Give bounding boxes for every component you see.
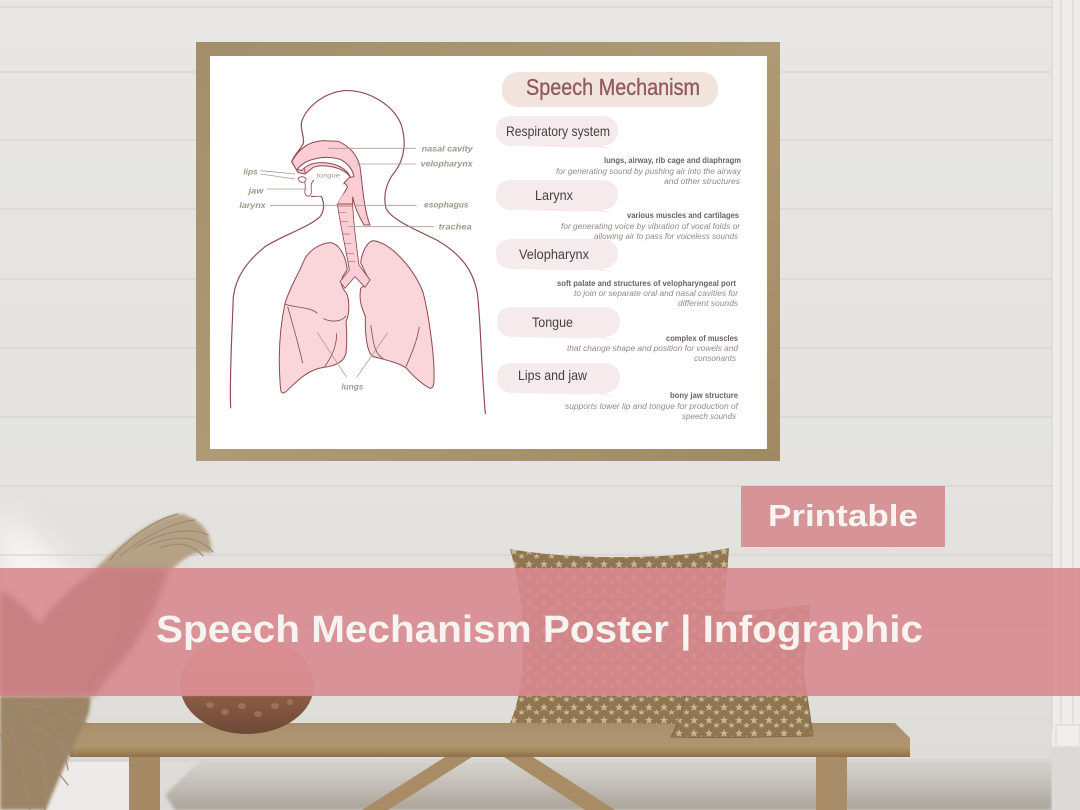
section: tongue [497,307,739,363]
lung lobe lines [285,304,419,367]
trachea [337,204,370,288]
pampas seen through banner [0,568,170,696]
section: respiratory system: and other structures [664,177,740,186]
title pill: Speech Mechanism [526,74,700,100]
printable badge: Printable [768,498,918,533]
section: larynx: Larynx [535,187,573,203]
poster frame [196,42,780,461]
section: lips and jaw: bony jaw structure [670,391,739,400]
trachea rings [337,204,355,262]
oral cavity [311,171,345,204]
banner title: Speech Mechanism Poster | Infographic [156,609,923,651]
labels: esophagus [424,201,469,210]
section: tongue: that change shape and position for vowels and [567,344,739,353]
plume bodies [98,514,211,572]
pointer lines [261,148,434,377]
section: lips and jaw [497,363,739,421]
small pillow [671,605,813,737]
section: larynx: allowing air to pass for voiceless sounds [594,232,738,241]
title pill [502,72,718,107]
window moulding [1052,0,1080,810]
labels [239,144,473,391]
body outline [230,91,485,414]
section: lips and jaw: speech sounds [682,412,736,421]
section: tongue: consonants [694,354,736,363]
section: lips and jaw: supports lower lip and tongue for production of [565,402,739,411]
section: respiratory system: lungs, airway, rib cage and diaphragm [604,156,741,165]
section: tongue: Tongue [532,314,573,330]
section: respiratory system: for generating sound by pushing air into the airway [556,167,742,176]
labels: lungs [341,382,364,391]
banner [0,568,1080,696]
section: velopharynx [496,239,738,308]
section: velopharynx: Velopharynx [519,246,589,262]
right lung [360,241,434,388]
section: respiratory system [496,116,742,186]
section: lips and jaw: Lips and jaw [518,367,588,383]
plume fibres [0,514,213,810]
section: velopharynx: soft palate and structures of velopharyngeal port [557,279,736,288]
printable badge [741,486,945,547]
left lung [279,243,349,393]
labels: nasal cavity [422,144,473,153]
section: velopharynx: to join or separate oral and nasal cavities for [574,289,738,298]
nasal cavity and pharynx [292,141,370,225]
palate [297,157,354,177]
labels: velopharynx [421,160,473,169]
labels: lips [243,167,258,176]
bench [65,723,910,810]
section: tongue: complex of muscles [666,334,739,343]
section: respiratory system: Respiratory system [506,123,610,139]
vase [180,636,314,734]
labels: jaw [248,186,264,195]
labels: trachea [439,222,472,231]
pampas grass [0,514,213,810]
lips and jaw [298,168,314,196]
anatomy diagram [230,91,485,414]
labels: larynx [239,201,266,210]
section: larynx [496,180,740,241]
large pillow [510,548,729,726]
section: larynx: various muscles and cartilages [627,211,740,220]
section: velopharynx: different sounds [678,299,738,308]
section: larynx: for generating voice by vibration of vocal folds or [561,222,740,231]
labels: tongue [317,173,341,179]
